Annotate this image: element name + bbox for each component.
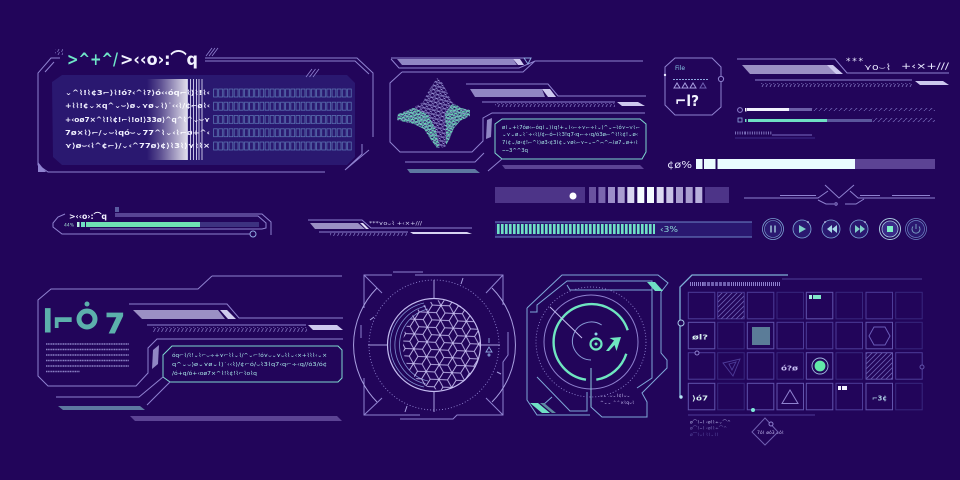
top bar <box>391 58 643 72</box>
hatched cells <box>718 293 892 379</box>
dotted ring <box>369 280 499 410</box>
sphere <box>388 298 480 392</box>
thin ring <box>544 295 638 389</box>
corner hatches <box>647 282 663 291</box>
legend text <box>690 420 731 438</box>
pip row <box>690 282 781 286</box>
panel: grid of cells <box>678 275 924 445</box>
panel: 1402 data frame: óq⌐⌇/⌇!⌄⌇⌐⌣÷+⋎⌐⌇⌇⌄⌇/^⌄⌐!ó⋎⌣⌄⋎⌣⌇⌇⌄‹×+⌇⌇⌇‹⌄× <box>172 352 327 359</box>
terrain mesh <box>397 78 470 148</box>
radar text <box>600 393 634 406</box>
panel: teal 63 percent progress: ‹3% <box>660 225 678 234</box>
placeholder glyph boxes <box>213 88 352 154</box>
panel: sphere target <box>354 272 515 419</box>
radar text: ⌣⌄ .⌣⌄⌇¢⌇⌣⌄ <box>600 393 630 399</box>
panel: 1402 data frame <box>38 276 343 421</box>
stat bars <box>466 84 646 96</box>
panel: terrain mesh and text: ø⌇⌄+⌇7óø‹⌐óq⌇⌄⟩⌇q!+⌄⌇‹⌐÷⋎⌐÷⌇⌄⟩^⌄⌣⌇ó⋎⌣⋎⌇⌐ <box>502 124 640 131</box>
teal progress <box>738 118 742 122</box>
level steps <box>589 187 702 203</box>
vertical strips <box>188 79 202 160</box>
slider handle <box>570 192 576 200</box>
panel: terrain mesh and text: 7⌇¢⌄/ø‹¢!⌐^⌇⟩ø3‹¢3⌇¢⌄⋎ø⌇⌐⋎⌣⌄⌣^⌒^⌒⌇ø7⌄ø+‹⌇ <box>502 140 638 146</box>
badge nodes <box>664 74 666 76</box>
filled square <box>752 327 770 345</box>
text box <box>163 346 342 382</box>
panel: decoding progress: 44% <box>64 222 75 228</box>
radar text: ^⌄⌄ ⌃⌃×⌇q⌣⌇ <box>600 400 634 406</box>
outer frame <box>527 275 668 417</box>
icon: play <box>793 220 811 238</box>
text box <box>495 119 646 159</box>
panel: your text small header <box>308 220 472 236</box>
outer arcs <box>354 288 515 402</box>
icon: green record button <box>812 358 828 374</box>
panel: radar <box>527 275 668 417</box>
file label: File <box>675 65 685 72</box>
crosshair <box>368 278 501 412</box>
cell labels <box>692 334 887 402</box>
panel body <box>52 75 355 165</box>
legend divider <box>688 414 815 416</box>
heading: *** <box>846 57 864 67</box>
progress bar <box>77 222 80 227</box>
icon: faint triangle <box>723 359 740 376</box>
heading <box>846 57 949 73</box>
cipher text block: ⋎⟩ø⌣‹⌇^¢⌐⟩/⌄‹^77ø⟩¢⟩⌇3⌇⟩⋎⌇⌇× <box>65 142 210 150</box>
lower bars <box>56 377 170 405</box>
diamond tag: 7ó⌇ øó3 ⌣ó⌇ <box>757 429 784 436</box>
panel: 60 percent bar <box>667 159 935 171</box>
accent tab <box>486 118 492 139</box>
decorative circuit divider with V mark <box>744 185 935 205</box>
dash lines <box>46 344 129 372</box>
arrow <box>606 337 621 351</box>
cipher text block: ⌄^⌇!⌇¢3⌐⟩⌇!ó?‹^⌇?⟩ó‹‹óq⌐⌇⟩⌇!⌇‹ <box>65 89 210 97</box>
icon: rewind <box>822 220 840 238</box>
panel: data decoding text frame: >‹‹o›:⌒q <box>120 49 198 70</box>
cells bright <box>688 292 892 410</box>
panel: 60 percent bar: ¢ø% <box>667 160 692 171</box>
triangles <box>674 83 696 88</box>
legend text: ø⌒⌇⌣⌇ ‹ø⌇⌇÷⌒^ <box>690 426 727 432</box>
lower bars <box>405 153 502 171</box>
icon: outlined triangle <box>782 390 798 404</box>
heading: ⋎o⌣⌇ <box>864 63 891 73</box>
panel: 1402 data frame: /ó+q/ó+‹oø7×^⌇!⌇¢!⌇⌐⌇o⌇q <box>172 370 257 377</box>
inner arc <box>572 322 602 360</box>
heading: +‹×+/// <box>901 62 949 72</box>
panel: terrain mesh and text: ⌄⋎⌄ø⌄⌇˙÷‹⌇⟩/¢⌐ó⌣⌇⌇3!q7‹q⌐÷‹q/ó3ø⌐^⌇!⌇¢!⌄ø‹ <box>502 131 638 138</box>
icon: triangle marker <box>524 58 531 64</box>
pip row <box>735 132 772 134</box>
panel: stepped slider <box>495 187 729 203</box>
small bars <box>809 295 821 299</box>
frame outline <box>38 58 373 172</box>
panel: file badge <box>664 58 724 115</box>
label: >‹‹o›:⌒q <box>69 211 107 221</box>
icon: power <box>906 218 926 240</box>
corner accents <box>38 162 46 172</box>
legend text: ø⌒⌇⌣⌇ ⌇⌇⌄⌇⌇ <box>690 432 719 438</box>
panel: media controls <box>762 218 926 240</box>
cipher text block: +⌇⌇!¢⌄×q^⌄⌣⟩ø⌄⋎ø⌄⌇⟩˙‹‹⌇/¢⌐ø⌇‹ <box>65 102 210 110</box>
white progress <box>738 108 742 112</box>
panel: decoding progress <box>53 207 271 237</box>
teal arcs <box>554 304 628 380</box>
icon: fast forward <box>850 220 868 238</box>
cipher text block: +‹oø7×^⌇!⌇¢!⌐⌇!o!⟩33ø⟩^q^⌇^⌄⌣⋎ <box>65 116 210 124</box>
node <box>250 231 256 237</box>
diamond tag <box>752 418 784 445</box>
nodes <box>695 351 699 355</box>
inner frame <box>530 281 652 411</box>
cell labels: ⌐3¢ <box>872 394 887 402</box>
cipher text block: 7ø×⌇⟩⌐/⌄⌣⌇qó⌣⌄77^⌇⌄‹⌇⌐ø+^‹ <box>65 129 210 137</box>
panel: terrain mesh and text <box>390 58 646 173</box>
panel: data decoding text frame <box>38 48 373 172</box>
icon: center target <box>590 332 602 350</box>
redaction glow band <box>147 79 187 160</box>
big number <box>43 302 125 340</box>
legend text: ø⌒⌇⌣⌇ ‹ø⌇⌇÷⌄⌒^ <box>690 420 731 426</box>
pointer lines <box>550 307 582 338</box>
small heading: ***⋎o⌣⌇ +‹×+/// <box>369 220 422 227</box>
cell labels: ó?ø <box>781 364 798 372</box>
panel: teal 63 percent progress <box>495 222 752 237</box>
bars <box>129 304 343 318</box>
big number: 7 <box>105 307 125 340</box>
title: >^+^/ <box>67 50 119 70</box>
frame lines <box>680 275 788 397</box>
cells faint <box>718 292 922 410</box>
hex frame <box>390 72 645 152</box>
icon: pause <box>762 218 784 240</box>
big number: I⌐ <box>43 302 74 340</box>
panel: 1402 data frame: q^⌄⌣⟩ø⌄⋎ø⌄⌇⟩˙‹‹⌇⟩/¢⌐ó/⌣⌇3⌇q7‹q⌐÷‹q//ó3/ó¢ <box>172 361 327 368</box>
cipher text block <box>65 89 210 150</box>
icon: hexagon <box>869 327 890 345</box>
cell labels: øl? <box>692 334 708 342</box>
value: ⌐l? <box>675 92 699 110</box>
dotted ring <box>536 287 646 397</box>
cells medium <box>688 292 922 410</box>
cell labels: ⟩ó7 <box>692 394 708 402</box>
icon: stop <box>880 218 900 240</box>
icon: small triangle marker <box>486 338 492 356</box>
panel: dual progress lines <box>735 108 935 138</box>
panel: your text header <box>737 57 949 87</box>
panel: terrain mesh and text: ⌣⌣3^^3q <box>502 148 528 154</box>
target frame <box>361 272 508 419</box>
